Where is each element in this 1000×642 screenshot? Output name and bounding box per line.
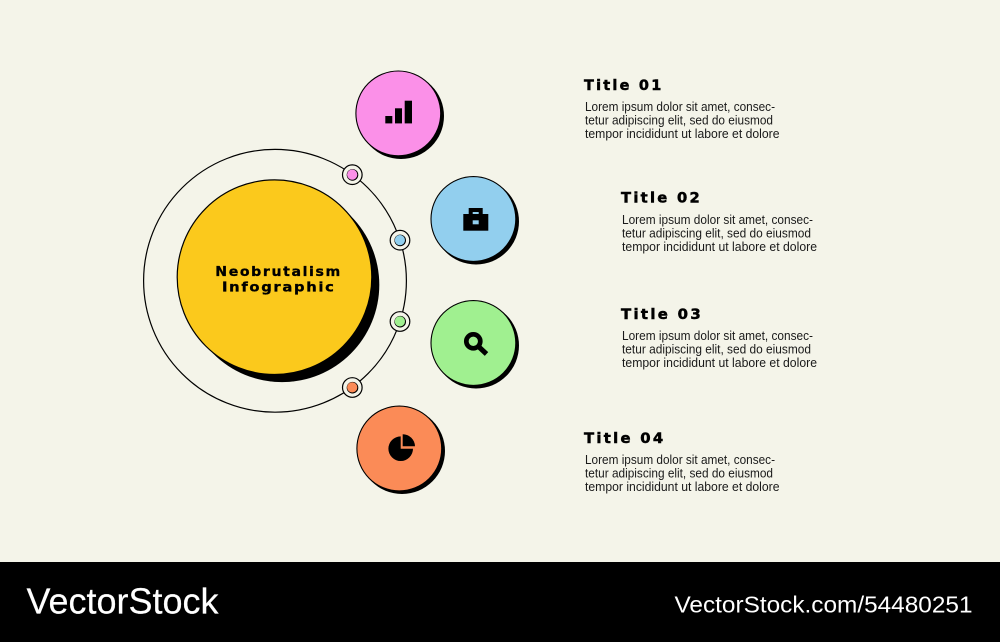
orbit ring bbox=[144, 149, 406, 412]
text block: title 03: tempor incididunt ut labore et dolore bbox=[622, 356, 817, 370]
icon: pie chart bbox=[388, 434, 415, 461]
node: blue bbox=[390, 230, 410, 250]
central heading: Neobrutalism bbox=[215, 265, 342, 280]
text block: title 01: Title 01 bbox=[584, 78, 664, 94]
footer image id: VectorStock.com/54480251 bbox=[674, 592, 972, 618]
central circle bbox=[177, 180, 379, 382]
footer bar bbox=[0, 562, 1000, 642]
text block: title 01: Lorem ipsum dolor sit amet, consec- bbox=[585, 100, 775, 114]
central heading bbox=[215, 265, 342, 296]
text block: title 02 bbox=[621, 191, 817, 254]
node: green bbox=[390, 312, 410, 331]
text block: title 02: tempor incididunt ut labore et dolore bbox=[622, 240, 817, 254]
icon: magnifier bbox=[466, 334, 486, 354]
circle: orange with pie icon bbox=[357, 406, 445, 494]
node: pink bbox=[342, 165, 362, 184]
text block: title 03 bbox=[621, 307, 817, 370]
text block: title 04: Title 04 bbox=[584, 431, 666, 447]
node: orange bbox=[342, 378, 362, 397]
text block: title 01: tetur adipiscing elit, sed do eiusmod bbox=[585, 114, 773, 128]
text block: title 01: tempor incididunt ut labore et dolore bbox=[585, 127, 780, 141]
circle: green with magnifier icon bbox=[431, 301, 519, 388]
text block: title 03: Title 03 bbox=[621, 307, 703, 323]
text block: title 04 bbox=[584, 431, 780, 494]
text block: title 03: Lorem ipsum dolor sit amet, consec- bbox=[622, 329, 813, 343]
icon: bar chart bbox=[385, 101, 412, 123]
central heading: Infographic bbox=[222, 281, 336, 296]
text block: title 03: tetur adipiscing elit, sed do eiusmod bbox=[622, 342, 811, 356]
text block: title 02: Title 02 bbox=[621, 191, 702, 207]
text block: title 02: Lorem ipsum dolor sit amet, consec- bbox=[622, 213, 813, 227]
icon: briefcase bbox=[463, 208, 488, 231]
footer logo: VectorStock bbox=[26, 580, 219, 621]
text block: title 01 bbox=[584, 78, 780, 141]
text block: title 04: tempor incididunt ut labore et dolore bbox=[585, 480, 780, 494]
text block: title 04: Lorem ipsum dolor sit amet, consec- bbox=[585, 453, 775, 467]
text block: title 04: tetur adipiscing elit, sed do eiusmod bbox=[585, 466, 773, 480]
circle: blue with briefcase icon bbox=[431, 177, 519, 264]
circle: pink with chart icon bbox=[356, 71, 444, 159]
text block: title 02: tetur adipiscing elit, sed do eiusmod bbox=[622, 226, 811, 240]
